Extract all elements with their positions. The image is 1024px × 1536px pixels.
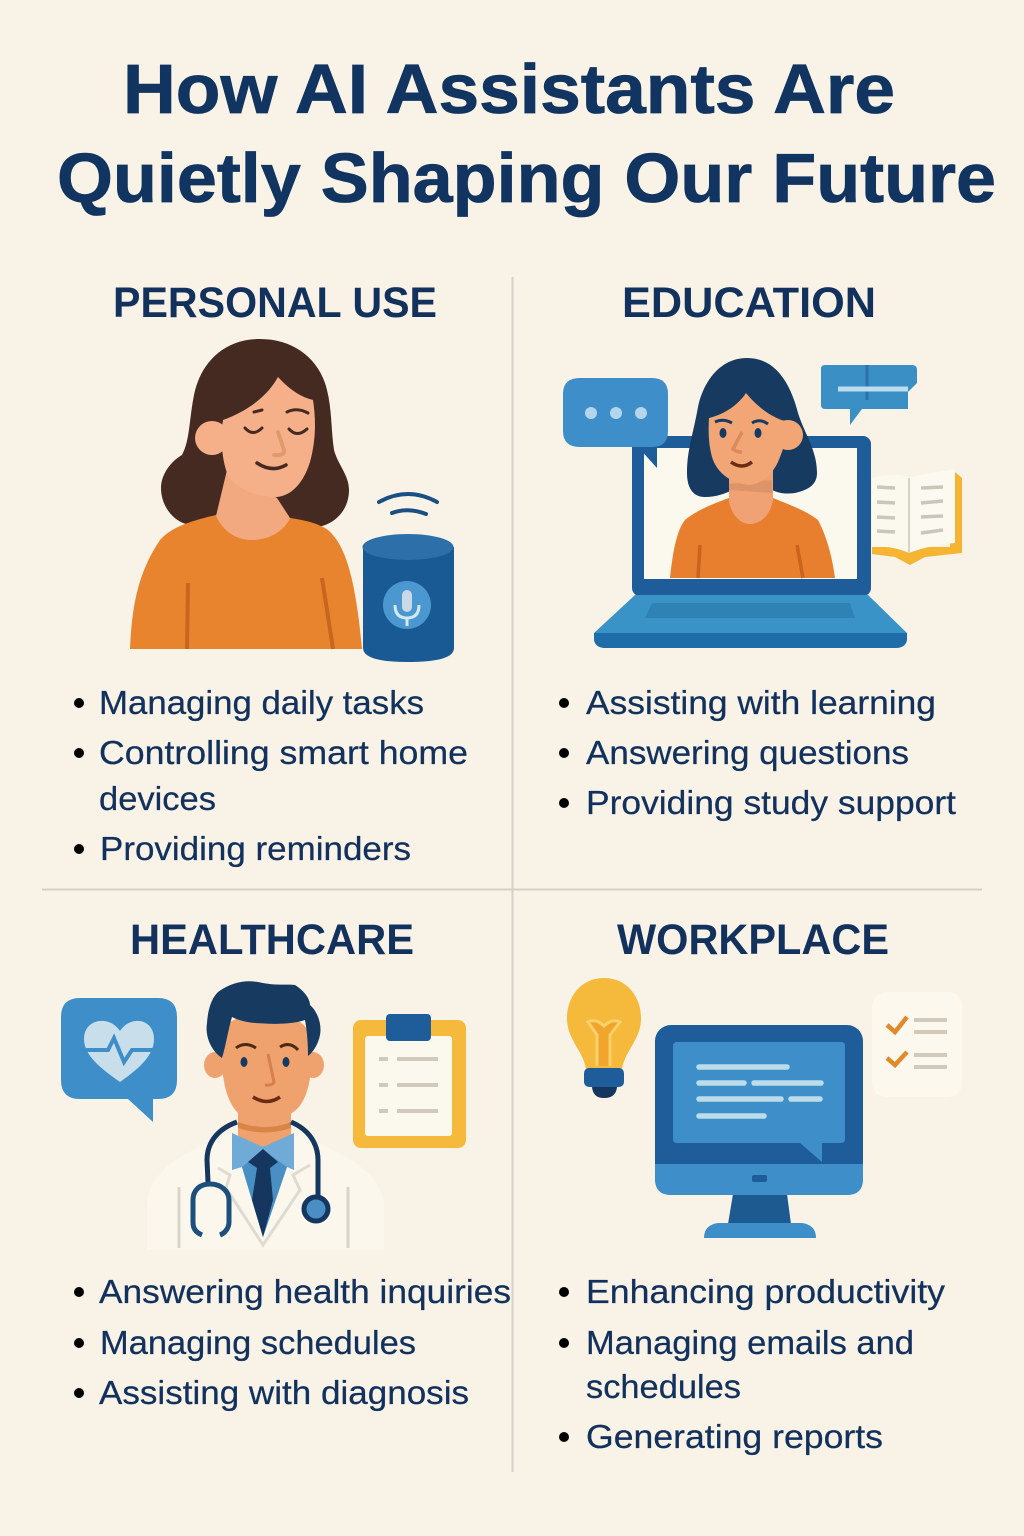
title: How AI Assistants Are <box>123 50 895 128</box>
icon: laptop <box>594 358 907 648</box>
icon: light bulb <box>567 978 641 1098</box>
bullet list: personal use: Managing daily tasks <box>99 684 424 721</box>
bullet list: workplace: schedules <box>586 1368 741 1405</box>
icon: speech bubble with lines <box>821 365 917 425</box>
bullet list: personal use: devices <box>99 780 216 817</box>
icon: open book <box>872 470 962 565</box>
heading: workplace: WORKPLACE <box>617 916 889 964</box>
bullet list: healthcare <box>74 1273 511 1411</box>
icon: heart speech bubble <box>61 998 177 1122</box>
title: Quietly Shaping Our Future <box>57 139 996 217</box>
icon: speech bubble with dots <box>563 378 668 468</box>
bullet list: healthcare: Assisting with diagnosis <box>99 1374 469 1411</box>
bullet list: education: Assisting with learning <box>586 684 936 721</box>
icon: student on laptop <box>563 358 962 648</box>
icon: doctor <box>147 981 384 1250</box>
heading: healthcare: HEALTHCARE <box>130 916 414 964</box>
icon: stethoscope <box>193 1122 328 1235</box>
bullet list: personal use: Controlling smart home <box>99 734 468 771</box>
bullet list: education: Providing study support <box>586 784 956 821</box>
title <box>57 50 996 217</box>
bullet list: personal use: Providing reminders <box>100 830 411 867</box>
panel: workplace <box>559 916 962 1455</box>
bullet list: healthcare: Managing schedules <box>100 1324 416 1361</box>
heading: education: EDUCATION <box>622 279 876 327</box>
icon: desktop monitor <box>655 1025 863 1238</box>
bullet list: workplace: Enhancing productivity <box>586 1273 946 1310</box>
panel: education <box>559 279 962 821</box>
bullet list: workplace: Generating reports <box>586 1418 883 1455</box>
icon: smart speaker <box>362 494 454 662</box>
bullet list: education: Answering questions <box>586 734 909 771</box>
bullet list: education <box>559 684 956 821</box>
heading: personal use: PERSONAL USE <box>113 279 437 327</box>
panel: personal use <box>74 279 468 867</box>
icon: clipboard <box>353 1014 466 1148</box>
icon: woman with smart speaker <box>130 339 454 662</box>
bullet list: workplace: Managing emails and <box>586 1324 914 1361</box>
panel: healthcare <box>61 916 511 1411</box>
bullet list: workplace <box>559 1273 946 1455</box>
bullet list: personal use <box>74 684 468 867</box>
icon: checklist <box>872 992 962 1097</box>
bullet list: healthcare: Answering health inquiries <box>99 1273 511 1310</box>
